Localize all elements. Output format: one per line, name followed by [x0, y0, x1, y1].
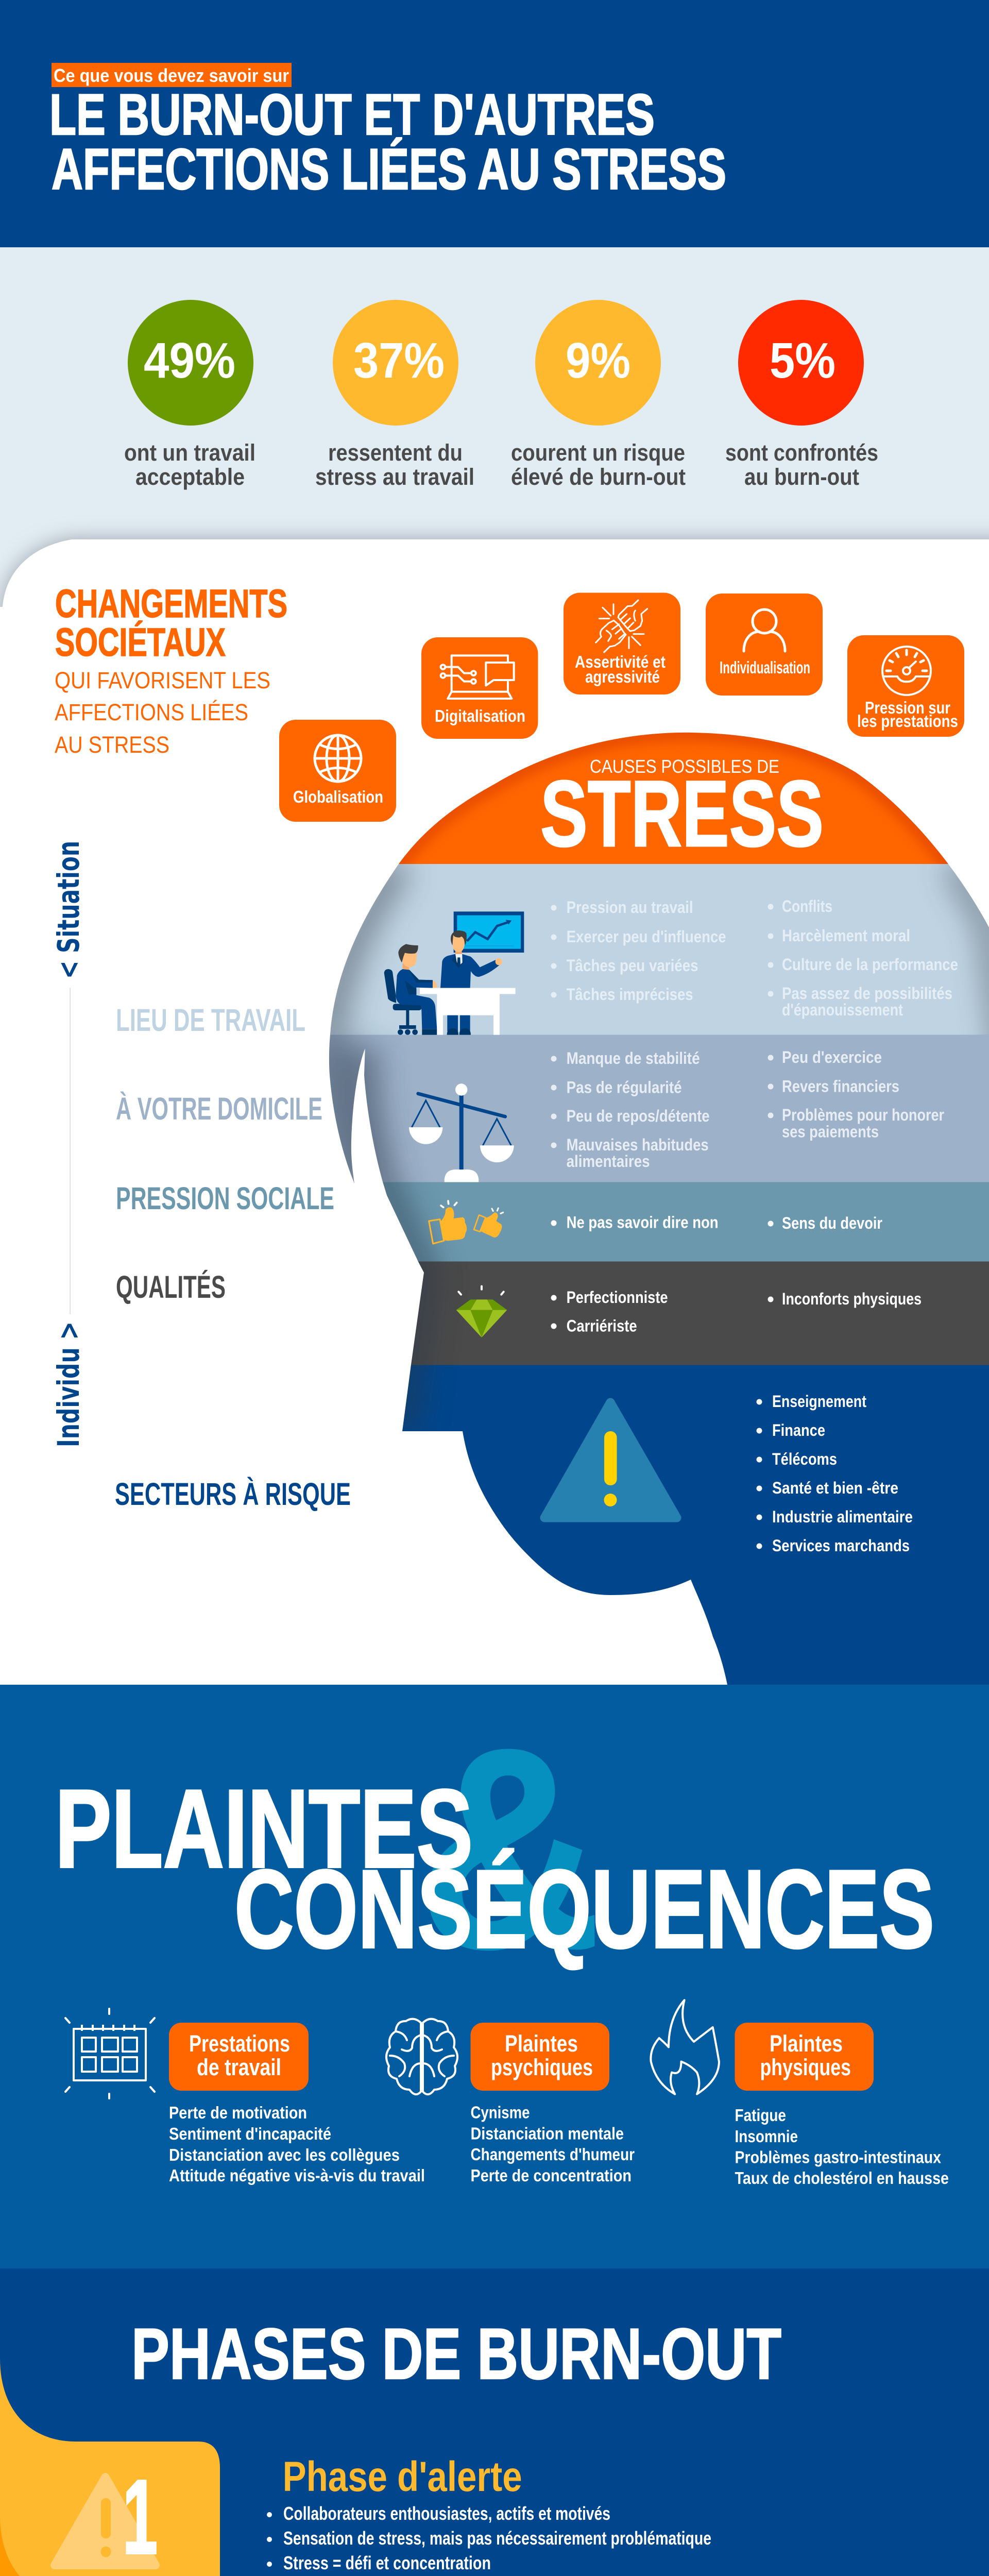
illustration: office meeting	[384, 911, 524, 1035]
phases title: PHASES DE BURN-OUT	[131, 2313, 781, 2394]
tile: assertivite: Assertivité et	[575, 652, 666, 671]
phase 1 icon and number	[55, 2458, 158, 2576]
band text: secteurs a risque: Finance	[772, 1421, 825, 1439]
side axis: individu: Individu >	[51, 1321, 86, 1447]
band text: lieu de travail: Tâches imprécises	[567, 985, 693, 1004]
icon: brain	[386, 2019, 457, 2094]
band text: qualites: Carriériste	[567, 1317, 637, 1335]
list: prestations: Distanciation avec les collègues	[169, 2145, 400, 2164]
societal changes heading: AU STRESS	[55, 732, 169, 758]
icon: calendar	[65, 2009, 155, 2098]
tile: individualisation: Individualisation	[720, 658, 810, 677]
band text: a votre domicile: Manque de stabilité	[567, 1049, 700, 1067]
ampersand: &	[418, 1690, 601, 2007]
stat: 9%	[511, 300, 686, 490]
stat: 49%	[124, 300, 255, 490]
white panel	[0, 539, 989, 1690]
list: physiques: Fatigue	[735, 2106, 786, 2125]
title: LE BURN-OUT ET D'AUTRES	[49, 82, 655, 147]
phase tiles	[0, 2359, 220, 2576]
stat: 9%: élevé de burn-out	[511, 464, 686, 490]
band text: lieu de travail: d'épanouissement	[782, 1001, 903, 1019]
band text: secteurs a risque: Santé et bien -être	[772, 1479, 898, 1497]
band text: qualites: Inconforts physiques	[782, 1290, 922, 1308]
tile: assertivite: agressivité	[585, 667, 660, 686]
phase 1 icon and number: 1	[123, 2458, 158, 2576]
stat: 49%: acceptable	[135, 464, 245, 490]
list: physiques	[735, 2106, 949, 2188]
box: plaintes psychiques: psychiques	[491, 2054, 593, 2080]
band text: a votre domicile	[551, 1048, 944, 1171]
header band	[0, 0, 989, 247]
band text: a votre domicile: alimentaires	[567, 1152, 650, 1171]
stress heading: STRESS	[540, 761, 824, 866]
list: psychiques: Cynisme	[471, 2103, 530, 2122]
band text: secteurs a risque: Industrie alimentaire	[772, 1507, 913, 1526]
band text: a votre domicile: Pas de régularité	[567, 1078, 682, 1096]
box: plaintes physiques: Plaintes	[770, 2030, 843, 2057]
side labels: QUALITÉS	[116, 1269, 226, 1304]
band text: lieu de travail: Tâches peu variées	[567, 956, 698, 975]
phase 1 text: Collaborateurs enthousiastes, actifs et motivés	[283, 2503, 610, 2524]
stat: 5%	[725, 300, 878, 490]
band text: a votre domicile: Problèmes pour honorer	[782, 1106, 944, 1124]
band text: secteurs a risque	[756, 1392, 913, 1555]
stat: 5%: sont confrontés	[725, 439, 878, 466]
box: plaintes physiques: physiques	[760, 2054, 851, 2080]
band text: a votre domicile: Peu d'exercice	[782, 1048, 882, 1066]
tile: pression sur les prestations: les prestations	[857, 711, 958, 731]
societal changes heading: CHANGEMENTS	[55, 582, 287, 626]
phase 1 text: Phase d'alerte	[283, 2453, 522, 2500]
side axis: situation: < Situation	[51, 841, 86, 979]
stat: 37%	[315, 300, 474, 490]
tile: globalisation: Globalisation	[293, 787, 383, 806]
phase 1 text	[267, 2453, 711, 2573]
phase 1 text: Sensation de stress, mais pas nécessairement problématique	[283, 2528, 711, 2549]
band text: lieu de travail: Conflits	[782, 897, 832, 916]
icon: warning triangle	[544, 1402, 677, 1518]
complaints panel	[0, 1685, 989, 2272]
list: psychiques: Distanciation mentale	[471, 2124, 624, 2143]
list: prestations: Perte de motivation	[169, 2103, 307, 2122]
icon: thumbs up	[429, 1201, 503, 1244]
tile: digitalisation	[421, 637, 538, 739]
box: prestations de travail: de travail	[197, 2054, 281, 2080]
stat: 49%: 49%	[144, 332, 235, 388]
side labels: SECTEURS À RISQUE	[115, 1477, 351, 1512]
box: plaintes psychiques: Plaintes	[505, 2030, 578, 2057]
societal changes heading: SOCIÉTAUX	[55, 620, 226, 665]
band text: a votre domicile: Mauvaises habitudes	[567, 1136, 709, 1154]
tile: pression sur les prestations	[847, 635, 964, 737]
box: prestations de travail	[169, 2023, 309, 2091]
band text: lieu de travail: Pas assez de possibilités	[782, 984, 952, 1003]
stress heading: CAUSES POSSIBLES DE	[590, 756, 779, 777]
band text: a votre domicile: Revers financiers	[782, 1077, 899, 1095]
white panel shadow	[3, 539, 989, 721]
tile: individualisation	[706, 594, 823, 696]
band text: lieu de travail	[551, 897, 958, 1019]
icon: diamond	[456, 1286, 507, 1337]
stat: 9%: 9%	[566, 332, 630, 388]
header tag: Ce que vous devez savoir sur	[54, 65, 289, 86]
societal changes heading: AFFECTIONS LIÉES	[55, 699, 248, 725]
band text: lieu de travail: Exercer peu d'influence	[567, 927, 726, 946]
band text: lieu de travail: Pression au travail	[567, 898, 693, 917]
box: prestations de travail: Prestations	[189, 2030, 290, 2057]
list: physiques: Taux de cholestérol en hausse	[735, 2168, 949, 2188]
head silhouette	[309, 721, 989, 1695]
band text: pression sociale: Ne pas savoir dire non	[567, 1213, 719, 1231]
band text: a votre domicile: ses paiements	[782, 1122, 879, 1141]
band text: pression sociale	[551, 1213, 882, 1232]
band text: secteurs a risque: Enseignement	[772, 1392, 866, 1411]
box: plaintes physiques	[735, 2023, 874, 2091]
stat: 37%: stress au travail	[315, 464, 474, 490]
stat: 5%: 5%	[770, 332, 835, 388]
complaints title	[55, 1766, 934, 1971]
icon: scales	[409, 1083, 514, 1182]
stat: 9%: courent un risque	[511, 439, 685, 466]
list: physiques: Insomnie	[735, 2127, 798, 2146]
band text: qualites	[551, 1288, 922, 1335]
side labels	[115, 1003, 351, 1512]
band text: lieu de travail: Culture de la performance	[782, 955, 958, 974]
stat: 49%: ont un travail	[124, 439, 255, 466]
band text: qualites: Perfectionniste	[567, 1288, 668, 1307]
side labels: LIEU DE TRAVAIL	[116, 1003, 305, 1038]
tile: pression sur les prestations: Pression sur	[865, 698, 950, 717]
tile: globalisation	[279, 720, 396, 822]
band text: secteurs a risque: Télécoms	[772, 1450, 837, 1468]
tile: digitalisation: Digitalisation	[435, 706, 525, 725]
band text: a votre domicile: Peu de repos/détente	[567, 1107, 710, 1125]
phases panel	[0, 2268, 989, 2576]
title	[49, 82, 726, 201]
list: psychiques: Perte de concentration	[471, 2166, 632, 2185]
icon: flame	[651, 2000, 719, 2094]
band text: lieu de travail: Harcèlement moral	[782, 926, 910, 945]
complaints title: PLAINTES	[55, 1766, 473, 1891]
list: psychiques: Changements d'humeur	[471, 2145, 635, 2164]
side labels: PRESSION SOCIALE	[116, 1181, 334, 1216]
list: psychiques	[471, 2103, 635, 2185]
stat: 37%: 37%	[353, 332, 445, 388]
phase 1 text: Stress = défi et concentration	[283, 2552, 491, 2573]
list: physiques: Problèmes gastro-intestinaux	[735, 2147, 942, 2167]
band text: secteurs a risque: Services marchands	[772, 1536, 910, 1555]
statistics panel background	[0, 247, 989, 618]
list: prestations	[169, 2103, 425, 2185]
tile: assertivite	[564, 592, 680, 694]
list: prestations: Sentiment d'incapacité	[169, 2124, 331, 2143]
side axis line	[70, 988, 71, 1314]
stat: 37%: ressentent du	[328, 439, 463, 466]
societal changes heading: QUI FAVORISENT LES	[55, 667, 270, 693]
side labels: À VOTRE DOMICILE	[116, 1091, 322, 1126]
stat: 5%: au burn-out	[744, 464, 859, 490]
box: plaintes psychiques	[471, 2023, 609, 2091]
title: AFFECTIONS LIÉES AU STRESS	[52, 137, 726, 201]
societal changes heading	[55, 582, 287, 758]
list: prestations: Attitude négative vis-à-vis du travail	[169, 2166, 425, 2185]
band text: pression sociale: Sens du devoir	[782, 1214, 882, 1232]
